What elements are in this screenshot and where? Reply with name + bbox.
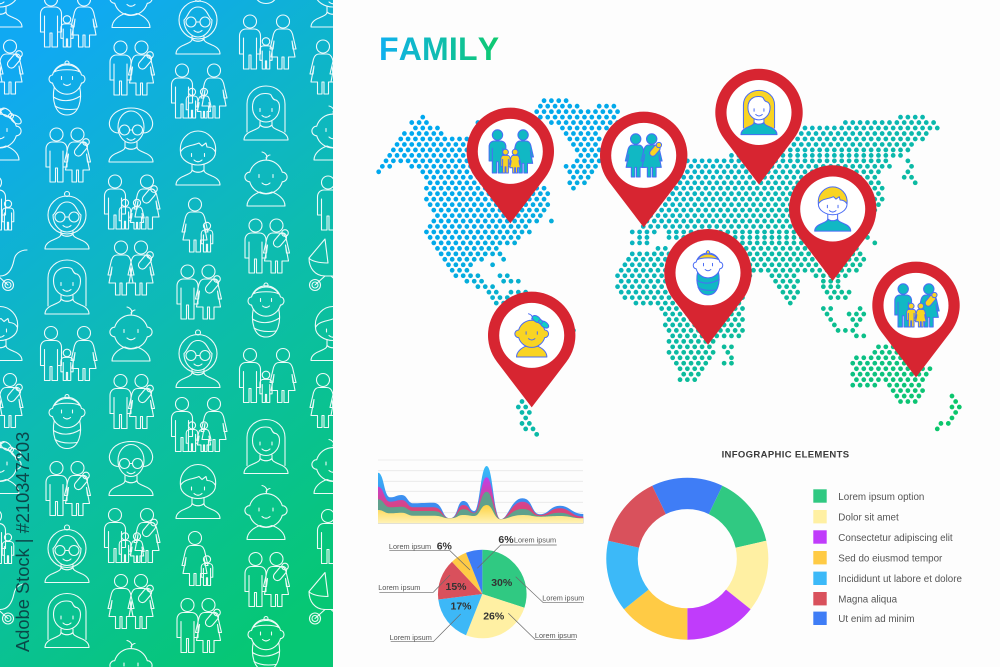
dotted world map xyxy=(379,101,960,434)
map pin: baby girl xyxy=(488,292,575,407)
pie chart xyxy=(378,534,584,642)
map pin: swaddled baby xyxy=(664,229,752,345)
panel: patterned gradient sidebar xyxy=(0,0,360,667)
pie callout labels: Lorem ipsum xyxy=(389,542,431,551)
legend: Ut enim ad minim xyxy=(838,614,915,625)
pie callout labels: Lorem ipsum xyxy=(542,594,584,602)
pie percentage labels: 30% xyxy=(491,577,513,589)
map pin: couple with baby xyxy=(600,112,687,227)
icon: swaddled baby xyxy=(693,251,723,295)
pie callout labels: Lorem ipsum xyxy=(535,631,577,640)
pie percentage labels: 6% xyxy=(498,534,514,546)
legend xyxy=(813,489,962,625)
pie callout labels xyxy=(378,536,584,642)
icon: family xyxy=(489,130,534,173)
legend: Incididunt ut labore et dolore xyxy=(838,574,962,585)
icon: family with baby xyxy=(895,284,939,327)
pie callout labels: Lorem ipsum xyxy=(390,633,432,642)
legend: Dolor sit amet xyxy=(838,513,899,524)
pie percentage labels xyxy=(437,534,514,622)
pie leader lines xyxy=(379,545,583,642)
pie callout labels: Lorem ipsum xyxy=(378,583,420,592)
legend: Sed do eiusmod tempor xyxy=(838,554,943,565)
legend: Magna aliqua xyxy=(838,595,898,606)
pie percentage labels: 15% xyxy=(445,581,467,593)
title: FAMILY xyxy=(379,31,499,67)
icon: woman xyxy=(741,90,777,135)
donut chart xyxy=(606,478,768,640)
section heading: INFOGRAPHIC ELEMENTS xyxy=(722,449,849,460)
pie percentage labels: 17% xyxy=(450,600,472,612)
legend: Consectetur adipiscing elit xyxy=(838,533,953,544)
map pin: family with baby xyxy=(872,262,960,377)
pie callout labels: Lorem ipsum xyxy=(514,536,556,544)
watermark: vertical stock id: Adobe Stock | #210347203 xyxy=(12,432,33,652)
pie percentage labels: 6% xyxy=(437,540,453,552)
map pin: family with two children xyxy=(467,108,554,223)
legend: Lorem ipsum option xyxy=(838,492,924,503)
icon: couple with baby xyxy=(625,134,662,177)
stacked area chart xyxy=(378,460,583,523)
icon: baby girl xyxy=(515,314,550,357)
map pin: man xyxy=(789,165,876,281)
map pin: woman xyxy=(715,69,803,184)
icon: man xyxy=(815,187,851,231)
pie percentage labels: 26% xyxy=(483,610,505,622)
